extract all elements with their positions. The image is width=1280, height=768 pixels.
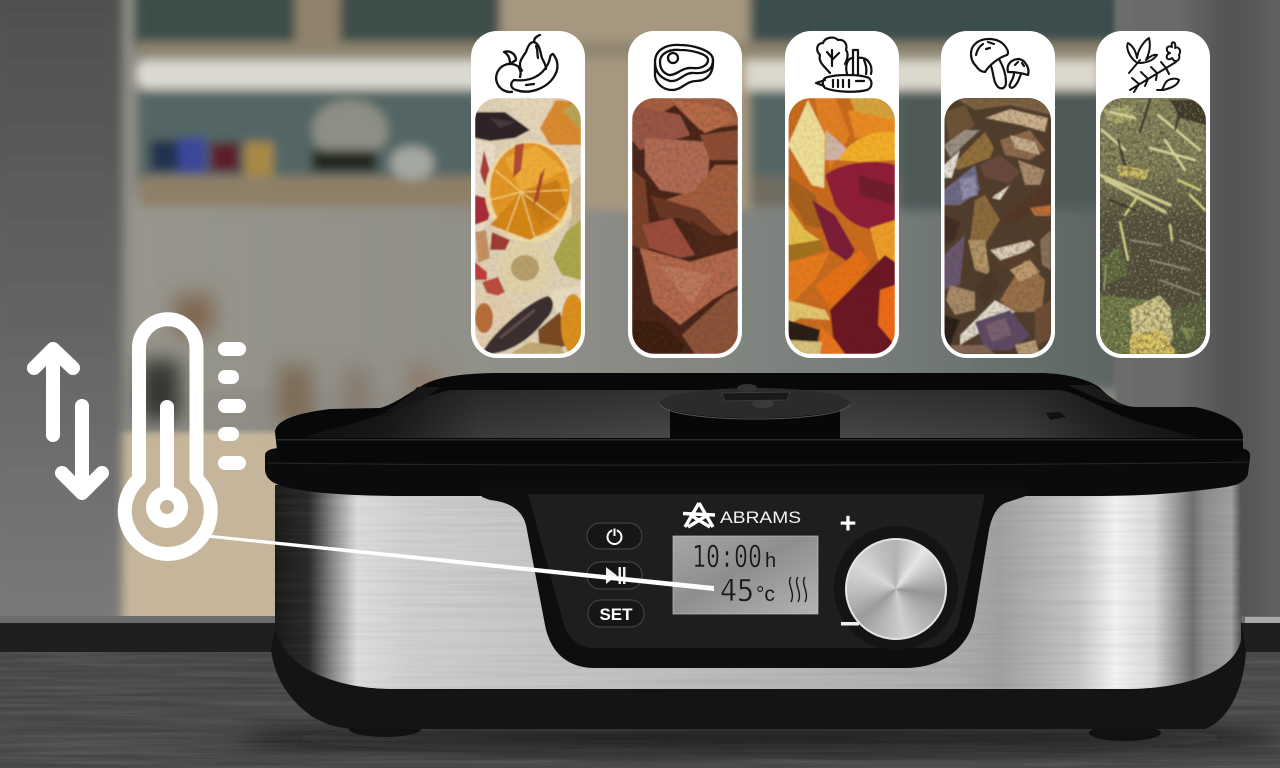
LCD display: h — [765, 550, 776, 572]
card: dried vegetables — [785, 31, 899, 358]
LCD display: °c — [756, 583, 775, 606]
card: dried meat — [628, 31, 742, 358]
icon: mushrooms — [971, 39, 1028, 88]
card: dried mushrooms — [941, 31, 1055, 358]
down arrow — [62, 406, 102, 493]
lid — [275, 373, 1243, 462]
temperature icon — [34, 319, 239, 554]
rim — [265, 448, 1250, 496]
up arrow — [34, 349, 73, 435]
play pause button — [587, 562, 642, 589]
icon: herbs — [1127, 38, 1180, 92]
food photo: mushrooms — [944, 98, 1051, 354]
steel body — [270, 480, 1250, 695]
set button: SET — [599, 605, 633, 624]
callout line — [207, 534, 714, 591]
brand logo — [683, 503, 801, 527]
brand logo: ABRAMS — [720, 508, 801, 527]
set button — [588, 600, 644, 627]
lower cabinet — [100, 295, 436, 627]
icon: fruit — [496, 35, 557, 92]
lid hub — [660, 384, 850, 439]
LCD display: 10:00 — [692, 540, 762, 575]
food photo: fruit — [475, 98, 585, 354]
control panel — [480, 487, 1026, 668]
dehydrator appliance — [265, 373, 1250, 741]
LCD display — [673, 536, 818, 614]
icon: vegetables — [816, 38, 871, 92]
icon: steak — [655, 45, 713, 90]
dial knob — [845, 538, 947, 640]
card: dried herbs — [1096, 31, 1210, 358]
food photo: vegetables — [788, 98, 895, 354]
countertop — [0, 616, 1280, 624]
minus sign — [841, 622, 859, 626]
LCD display: 45 — [720, 574, 754, 609]
bottom base — [271, 620, 1246, 741]
dial recess — [834, 526, 958, 650]
plus sign: + — [840, 508, 856, 540]
lid tray surface — [300, 390, 1200, 438]
power button — [587, 523, 642, 549]
food photo: herbs — [1100, 98, 1206, 354]
card: dried fruit — [471, 31, 585, 358]
food photo: meat — [632, 98, 738, 354]
thermometer — [125, 319, 211, 554]
scale ticks — [225, 349, 239, 463]
